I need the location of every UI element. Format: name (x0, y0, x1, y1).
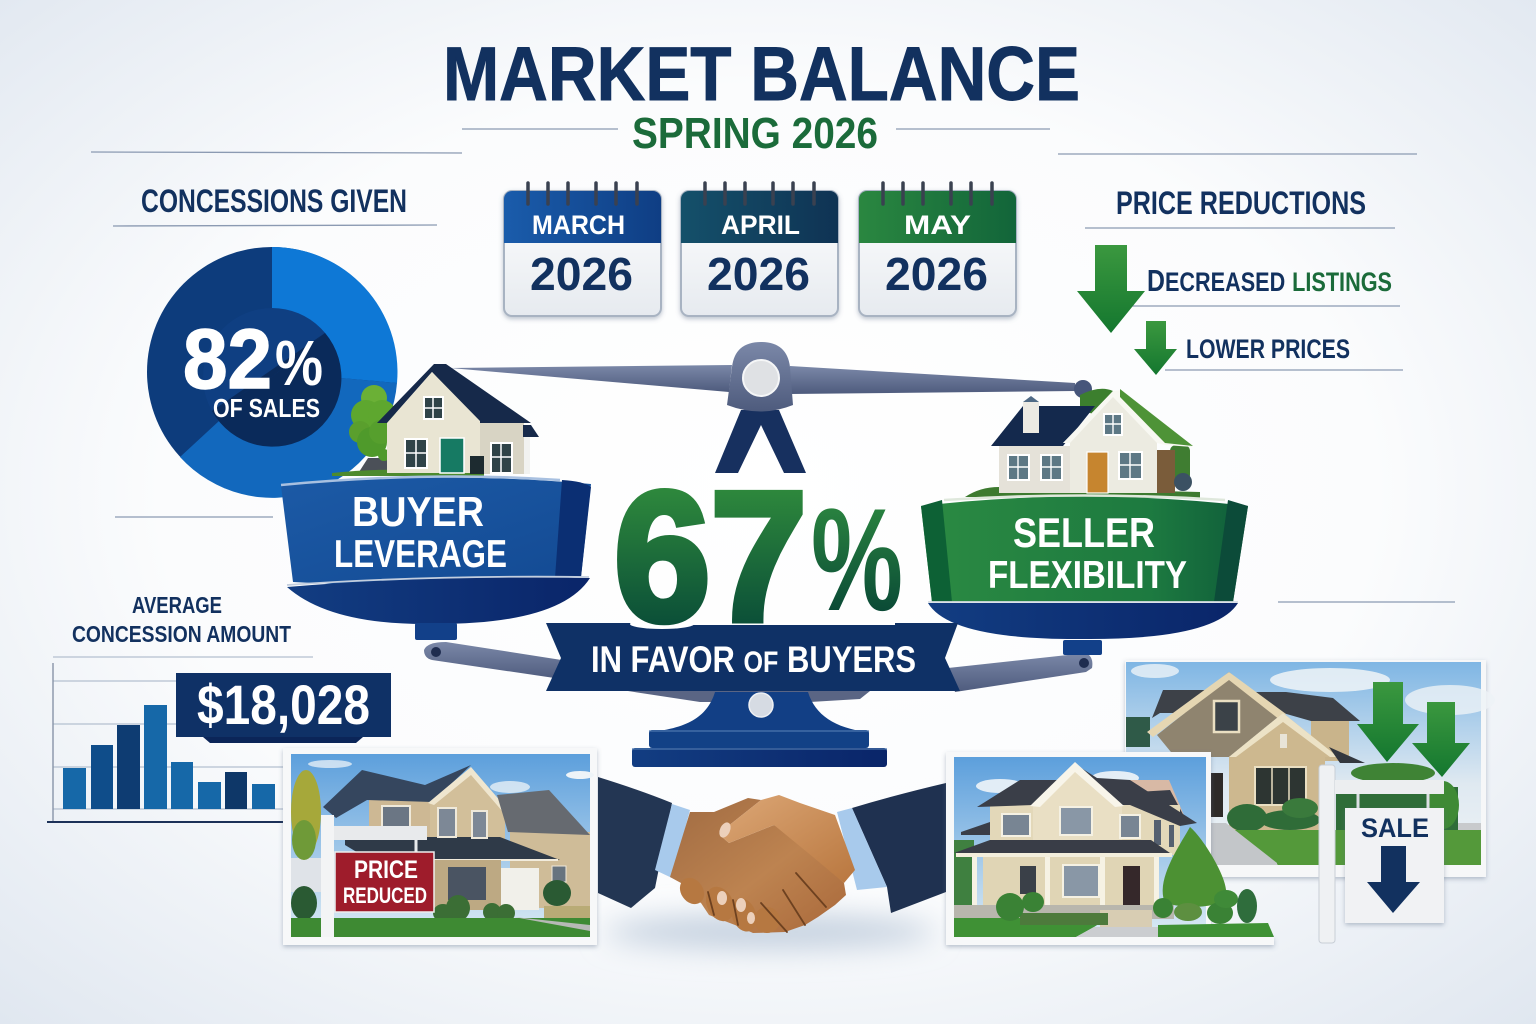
icon: navy down arrow (1367, 846, 1420, 913)
icon: large green arrow (1357, 682, 1419, 762)
ribbon: in favor of buyers: IN FAVOR OF BUYERS (591, 639, 916, 680)
donut chart: 82% of sales: % (275, 327, 323, 399)
calendar: March 2026 (504, 183, 661, 316)
right sleeve (852, 783, 946, 913)
sign: sale (1319, 765, 1444, 943)
handshake (598, 777, 946, 937)
average concession label: AVERAGE (132, 592, 222, 618)
average concession label (72, 592, 291, 647)
hands (670, 798, 846, 933)
left sleeve (598, 777, 672, 908)
calendar: May 2026: 2026 (885, 248, 988, 300)
handshake floor shadow (605, 914, 935, 950)
sign: price reduced: REDUCED (343, 883, 427, 908)
label: lower prices: LOWER PRICES (1186, 334, 1350, 364)
house on left pan (332, 364, 539, 476)
price reductions list (1077, 245, 1392, 375)
right pan: seller flexibility: FLEXIBILITY (988, 554, 1187, 597)
heading: price reductions: PRICE REDUCTIONS (1116, 185, 1366, 221)
calendar: May 2026: MAY (904, 210, 971, 240)
donut chart: 82% of sales (147, 247, 397, 498)
big statistic: 67%: % (811, 478, 903, 641)
photo: cream house (946, 752, 1274, 945)
scale legs (715, 410, 806, 473)
sign: price reduced: PRICE (354, 856, 418, 884)
icon: large down arrow (1077, 245, 1145, 333)
donut chart: 82% of sales: 82 (183, 312, 272, 406)
house on right pan (965, 389, 1200, 498)
right pan: seller flexibility (921, 389, 1248, 655)
left pan: buyer leverage (281, 364, 591, 640)
photo: beige house with down arrows (1125, 660, 1495, 877)
icon: small down arrow (1134, 321, 1177, 375)
callout: $18,028: $18,028 (197, 673, 370, 736)
icon: second green arrow (1412, 702, 1470, 777)
calendar: March 2026: 2026 (530, 248, 633, 300)
scale base (628, 691, 887, 767)
heading: concessions given: CONCESSIONS GIVEN (141, 183, 407, 219)
label: decreased listings: DECREASED LISTINGS (1147, 263, 1392, 298)
left pan: buyer leverage: LEVERAGE (334, 533, 507, 576)
donut chart: 82% of sales: OF SALES (213, 393, 320, 423)
ribbon: in favor of buyers (546, 623, 960, 691)
calendar: March 2026: MARCH (532, 210, 625, 240)
calendar: April 2026: 2026 (707, 248, 810, 300)
subtitle: SPRING 2026 (632, 109, 878, 158)
average concession label: CONCESSION AMOUNT (72, 621, 291, 647)
sign: sale: SALE (1361, 813, 1429, 843)
title: MARKET BALANCE (443, 32, 1080, 117)
calendar: April 2026: APRIL (721, 210, 800, 240)
right pan: seller flexibility: SELLER (1013, 509, 1155, 556)
big statistic: 67%: 67 (614, 453, 807, 659)
scale lower arms (424, 642, 1092, 692)
calendar: April 2026 (681, 183, 838, 316)
bar chart: concession amounts (47, 657, 313, 822)
sign: price reduced (321, 815, 434, 937)
photo: price reduced house (283, 748, 597, 945)
scale beam (450, 342, 1092, 412)
calendar: May 2026 (859, 183, 1016, 316)
left pan: buyer leverage: BUYER (352, 488, 484, 535)
